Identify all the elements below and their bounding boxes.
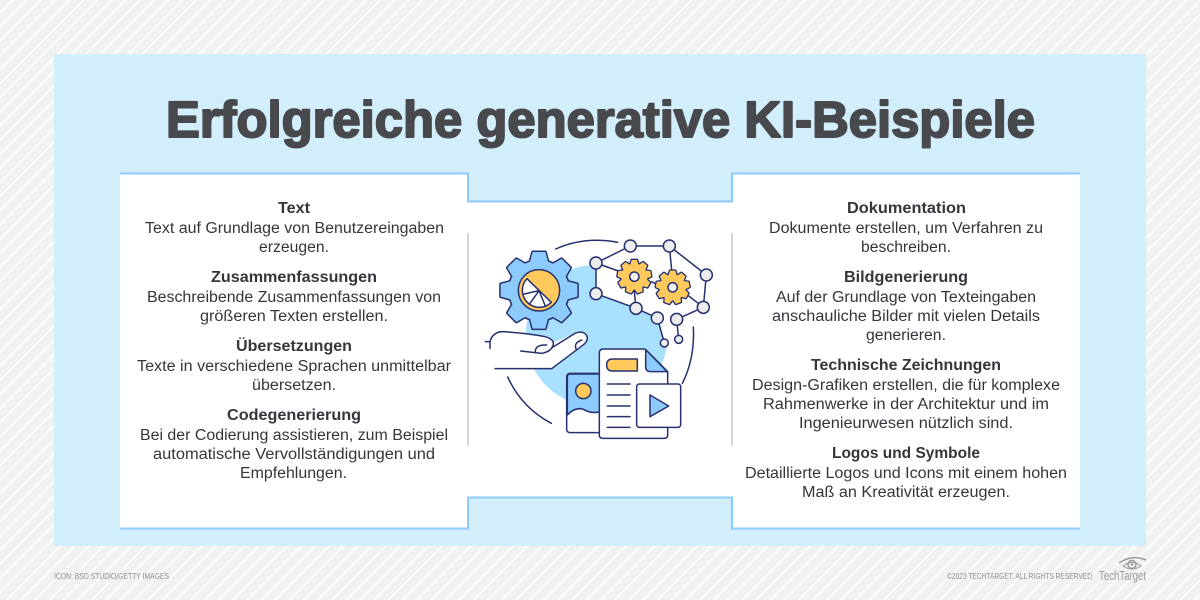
item: Dokumentation: beschreiben.: [861, 239, 951, 256]
item: Codegenerierung: [140, 407, 448, 482]
item: Logos und Symbole: Maß an Kreativität erzeugen.: [802, 484, 1010, 501]
item: Text: [145, 200, 444, 256]
panel: blue background: [54, 54, 1146, 546]
item: Bildgenerierung: Auf der Grundlage von Texteingaben: [776, 289, 1036, 306]
icon: hand: [485, 332, 587, 369]
panel border: bottom: [120, 498, 1080, 528]
icon: small gear one: [617, 260, 651, 294]
item: Zusammenfassungen: [147, 269, 441, 325]
item: Bildgenerierung: [772, 269, 1040, 344]
icon: network nodes: [590, 240, 712, 347]
divider left: [467, 233, 469, 446]
item: Bildgenerierung: anschauliche Bilder mit vielen Details: [772, 308, 1040, 325]
footer: TechTarget logo: [1099, 558, 1146, 583]
item: Technische Zeichnungen: Ingenieurwesen nützlich sind.: [799, 415, 1013, 432]
logo: wordmark: TechTarget: [1099, 568, 1146, 583]
item: Dokumentation: Dokumentation: [847, 200, 966, 217]
item: Übersetzungen: Texte in verschiedene Sprachen unmittelbar: [137, 358, 451, 375]
item: Zusammenfassungen: Zusammenfassungen: [211, 269, 377, 286]
central illustration: [485, 240, 712, 438]
panel border: top: [120, 174, 1080, 202]
footer: image credit: ICON: BSD STUDIO/GETTY IMAGES: [54, 571, 169, 581]
icon: video card: [637, 384, 681, 427]
icon: image card: [567, 373, 610, 433]
footer: copyright: ©2023 TECHTARGET. ALL RIGHTS RESERVED: [947, 571, 1092, 581]
item: Bildgenerierung: generieren.: [866, 327, 946, 344]
item: Bildgenerierung: Bildgenerierung: [844, 269, 968, 286]
item: Codegenerierung: automatische Vervollständigungen und: [153, 446, 435, 463]
item: Übersetzungen: übersetzen.: [252, 377, 336, 394]
icon: document: [599, 349, 668, 438]
item: Text: erzeugen.: [259, 239, 329, 256]
item: Technische Zeichnungen: [752, 357, 1060, 432]
icon: network: [590, 240, 712, 347]
item: Dokumentation: [769, 200, 1043, 256]
item: Text: Text: [278, 200, 311, 217]
left text column: [137, 200, 451, 482]
item: Codegenerierung: Bei der Codierung assistieren, zum Beispiel: [140, 427, 448, 444]
icon: large gear with pie chart: [501, 252, 577, 329]
item: Text: Text auf Grundlage von Benutzereingaben: [145, 220, 444, 237]
divider right: [731, 233, 733, 446]
item: Übersetzungen: [137, 336, 451, 394]
icon: outer arcs: [508, 240, 694, 423]
icon: small gear two: [656, 271, 690, 304]
right text column: [745, 200, 1067, 501]
item: Übersetzungen: Übersetzungen: [236, 336, 352, 355]
item: Technische Zeichnungen: Design-Grafiken erstellen, die für komplexe: [752, 377, 1060, 394]
item: Zusammenfassungen: größeren Texten erstellen.: [200, 308, 388, 325]
item: Logos und Symbole: Detaillierte Logos und Icons mit einem hohen: [745, 465, 1067, 482]
panel: white content area: [120, 174, 1080, 528]
item: Technische Zeichnungen: Technische Zeichnungen: [811, 357, 1001, 374]
icon: light blue circle: [526, 265, 668, 407]
logo: eye: [1119, 558, 1146, 569]
item: Codegenerierung: Empfehlungen.: [240, 465, 347, 482]
item: Logos und Symbole: [745, 445, 1067, 501]
item: Codegenerierung: Codegenerierung: [227, 407, 361, 424]
item: Zusammenfassungen: Beschreibende Zusammenfassungen von: [147, 289, 441, 306]
item: Logos und Symbole: Logos und Symbole: [832, 445, 980, 462]
item: Technische Zeichnungen: Rahmenwerke in der Architektur und im: [763, 396, 1049, 413]
item: Dokumentation: Dokumente erstellen, um Verfahren zu: [769, 220, 1043, 237]
title: Erfolgreiche generative KI-Beispiele: [166, 91, 1035, 148]
